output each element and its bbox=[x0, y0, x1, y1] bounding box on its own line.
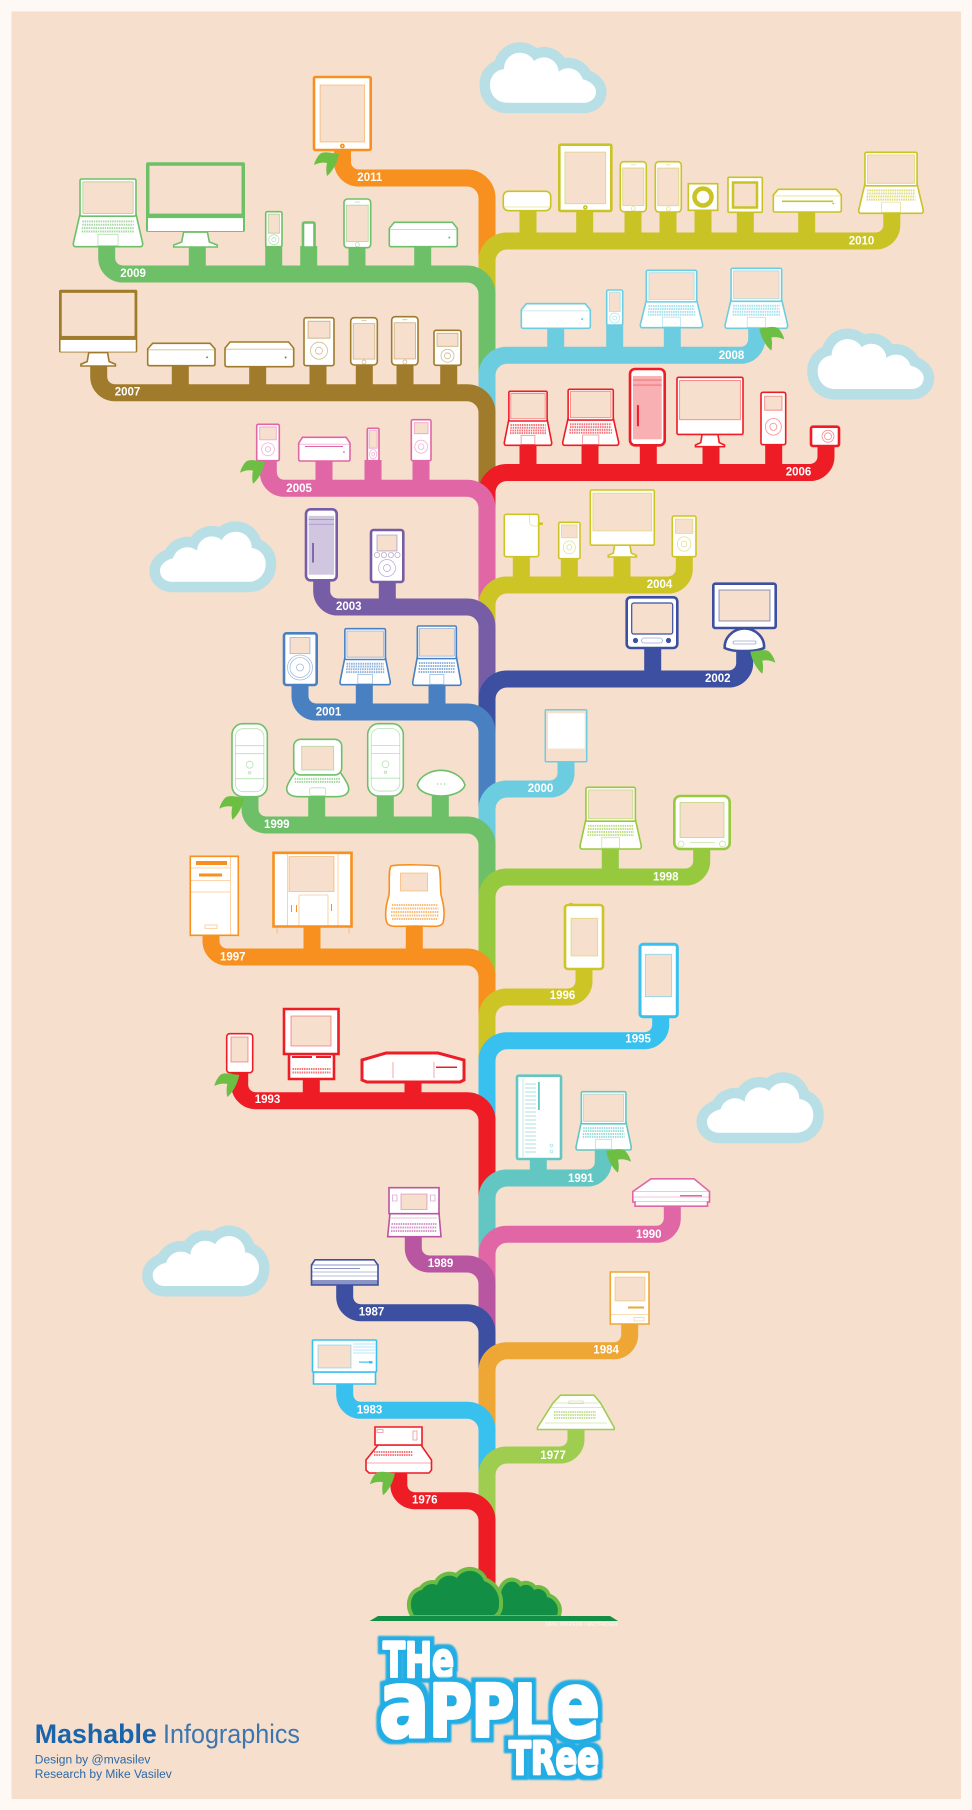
icon: PowerBook G3 bbox=[580, 787, 641, 849]
branch path 2009 bbox=[107, 245, 487, 376]
label 1976: 1976 bbox=[412, 1495, 438, 1507]
year 1997 branch bbox=[190, 853, 487, 1018]
icon: iBook clamshell bbox=[287, 739, 349, 797]
icon: leaf bbox=[314, 152, 339, 176]
year 1976 branch bbox=[366, 1427, 487, 1590]
label 2004: 2004 bbox=[647, 579, 673, 591]
brand name: Mashable bbox=[35, 1719, 157, 1749]
branch path 1998 bbox=[487, 848, 702, 978]
year 2003 branch bbox=[306, 509, 487, 700]
icon: iPhone 3GS bbox=[344, 199, 371, 248]
icon: iPod shuffle bbox=[811, 427, 839, 446]
year 1993 branch bbox=[214, 1009, 487, 1200]
icon: leaf bbox=[370, 1472, 395, 1495]
icon: iPod bbox=[672, 516, 696, 557]
branch path 1976 bbox=[399, 1472, 487, 1590]
icon: Time Capsule bbox=[521, 304, 590, 328]
branch path 1996 bbox=[487, 968, 584, 1062]
branch path 2003 bbox=[322, 579, 487, 700]
year 1977 branch bbox=[487, 1395, 614, 1522]
year 1987 branch bbox=[312, 1260, 487, 1372]
label 1991: 1991 bbox=[568, 1173, 594, 1185]
icon: MacBook bbox=[504, 391, 552, 445]
cloud: top center bbox=[490, 53, 596, 103]
icon: eMate 300 bbox=[386, 865, 444, 926]
icon: iPod touch bbox=[655, 162, 681, 212]
branch path 1997 bbox=[211, 926, 487, 1018]
year 1996 branch bbox=[487, 903, 603, 1062]
icon: PowerBook G4 bbox=[340, 629, 390, 685]
icon: eMac bbox=[627, 597, 677, 648]
icon: iPod classic bbox=[304, 318, 334, 366]
year 1989 branch bbox=[388, 1188, 487, 1334]
year 2011 branch bbox=[314, 77, 487, 262]
design credit: Design by @mvasilev bbox=[35, 1754, 151, 1766]
icon: Mac mini bbox=[299, 437, 350, 461]
cloud: top right bbox=[818, 339, 924, 389]
icon: PowerBook bbox=[576, 1092, 631, 1150]
icon: Time Capsule bbox=[225, 342, 294, 367]
label 1987: 1987 bbox=[359, 1306, 384, 1318]
icon: Power Mac tower bbox=[190, 856, 238, 935]
icon: Newton bbox=[227, 1034, 253, 1073]
branch path 2001 bbox=[300, 684, 487, 810]
icon: MacBook bbox=[73, 179, 143, 247]
icon: iMac G3 bbox=[674, 796, 730, 849]
icon: iMac G4 bbox=[713, 584, 776, 651]
brand: Mashable Infographics bbox=[35, 1719, 300, 1749]
label 2000: 2000 bbox=[528, 783, 553, 795]
label 1984: 1984 bbox=[593, 1345, 619, 1357]
research credit: Research by Mike Vasilev bbox=[35, 1769, 172, 1781]
icon: Newton MessagePad bbox=[565, 903, 603, 969]
label 2010: 2010 bbox=[849, 235, 874, 247]
icon: MacBook Air bbox=[859, 152, 923, 213]
icon: iPod nano bbox=[434, 330, 461, 365]
year 2006 branch bbox=[487, 369, 839, 510]
data source credit: DATA : WIKIPEDIA / MACTRACKER bbox=[546, 1622, 618, 1628]
icon: leaf bbox=[214, 1073, 239, 1097]
branch path 1987 bbox=[345, 1285, 487, 1372]
icon: Mac mini bbox=[389, 222, 457, 247]
branch path 1991 bbox=[487, 1149, 603, 1256]
branch path 1983 bbox=[345, 1384, 487, 1477]
icon: MacBook Air bbox=[725, 268, 788, 328]
label 2008: 2008 bbox=[719, 350, 745, 362]
icon: leaf bbox=[759, 327, 784, 350]
year 1999 branch bbox=[219, 724, 487, 898]
icon: iPod nano bbox=[257, 424, 279, 461]
year 2005 branch bbox=[240, 420, 487, 606]
icon: Macintosh TV bbox=[284, 1009, 338, 1079]
year 1991 branch bbox=[487, 1076, 631, 1256]
cloud: left 2003 bbox=[160, 532, 266, 582]
icon: Apple Lisa bbox=[312, 1340, 376, 1384]
icon: leaf bbox=[606, 1149, 631, 1173]
year 1983 branch bbox=[312, 1340, 487, 1477]
label 2009: 2009 bbox=[120, 268, 146, 280]
label 1983: 1983 bbox=[357, 1405, 382, 1417]
icon: iPhone bbox=[351, 318, 377, 365]
title word: Apple: aPPLe bbox=[379, 1650, 600, 1758]
year 1984 branch bbox=[487, 1272, 649, 1432]
icon: iPod nano bbox=[266, 212, 282, 247]
branch path 2005 bbox=[268, 460, 487, 606]
branch path 2008 bbox=[487, 323, 757, 414]
cloud: right 1991 bbox=[707, 1083, 813, 1133]
icon: iPod nano bbox=[607, 290, 623, 325]
icon: iPod mini bbox=[559, 522, 580, 559]
brand section: Infographics bbox=[163, 1719, 300, 1749]
icon: iPhone 4 bbox=[620, 162, 646, 212]
branch path 1990 bbox=[487, 1206, 672, 1285]
year 2008 branch bbox=[487, 268, 788, 414]
year 2009 branch bbox=[73, 162, 487, 376]
icon: leaf bbox=[750, 650, 775, 674]
icon: iPad bbox=[314, 77, 371, 150]
icon: Macintosh II bbox=[312, 1260, 378, 1285]
icon: iMac bbox=[146, 162, 245, 247]
icon: iPod bbox=[761, 392, 786, 445]
label 1989: 1989 bbox=[428, 1258, 453, 1270]
branch path 2002 bbox=[487, 647, 745, 733]
icon: Power Mac G5 bbox=[306, 509, 337, 580]
icon: Apple TV / server bbox=[773, 189, 841, 212]
year 2007 branch bbox=[59, 290, 487, 494]
branch path 1984 bbox=[487, 1323, 630, 1432]
label 1993: 1993 bbox=[255, 1094, 280, 1106]
credits bbox=[35, 1754, 172, 1781]
branch path 1989 bbox=[413, 1236, 487, 1334]
icon: leaf bbox=[219, 796, 244, 820]
year 1995 branch bbox=[487, 944, 677, 1122]
bush: left bbox=[411, 1571, 499, 1615]
branch path 2007 bbox=[99, 364, 487, 494]
icon: iPod shuffle bbox=[303, 222, 314, 248]
icon: Apple II bbox=[538, 1395, 614, 1430]
icon: Macintosh 128K bbox=[610, 1272, 649, 1324]
icon: iPad 2010 bbox=[559, 145, 611, 211]
icon: Macintosh box bbox=[362, 1053, 464, 1082]
icon: Power Mac G4 bbox=[232, 724, 267, 797]
icon: Quadra tower bbox=[517, 1076, 561, 1159]
branch path 2000 bbox=[487, 761, 566, 846]
icon: Power Mac G4 Cube bbox=[545, 710, 587, 762]
year 2001 branch bbox=[284, 626, 487, 810]
icon: iMac G5 bbox=[590, 490, 654, 557]
label 2005: 2005 bbox=[286, 483, 312, 495]
year 1998 branch bbox=[487, 787, 730, 978]
icon: iPod shuffle bbox=[688, 184, 718, 210]
icon: MacBook bbox=[640, 270, 703, 328]
branch path 2010 bbox=[487, 209, 892, 295]
icon: Twentieth Anniversary Mac bbox=[274, 853, 352, 934]
icon: Mac Pro bbox=[630, 369, 665, 445]
branch path 1977 bbox=[487, 1429, 576, 1522]
branch path 1995 bbox=[487, 1016, 661, 1122]
label 1999: 1999 bbox=[264, 819, 290, 831]
icon: iPod shuffle bbox=[367, 428, 379, 461]
label 2006: 2006 bbox=[786, 466, 811, 478]
ground bbox=[370, 1616, 618, 1621]
icon: Apple I bbox=[366, 1427, 432, 1473]
icon: Newton bbox=[640, 944, 677, 1017]
icon: iBook bbox=[413, 626, 461, 685]
label 2001: 2001 bbox=[316, 706, 342, 718]
branch path 2004 bbox=[487, 555, 684, 628]
label 2003: 2003 bbox=[336, 601, 362, 613]
year 1990 branch bbox=[487, 1179, 710, 1285]
icon: leaf bbox=[240, 460, 265, 484]
icon: Mac mini bbox=[148, 343, 215, 366]
label 2007: 2007 bbox=[115, 386, 140, 398]
label 1977: 1977 bbox=[540, 1450, 566, 1462]
bush: right bbox=[499, 1582, 558, 1615]
icon: AirPort base station bbox=[417, 770, 465, 796]
icon: Macintosh Portable bbox=[388, 1188, 441, 1237]
year 2002 branch bbox=[487, 584, 776, 733]
title word: Tree: TRee bbox=[509, 1732, 599, 1785]
label 1996: 1996 bbox=[550, 990, 575, 1002]
icon: iPod third gen bbox=[371, 530, 403, 582]
label 2011: 2011 bbox=[357, 172, 383, 184]
branch path 2011 bbox=[342, 149, 487, 262]
branch path 1993 bbox=[240, 1072, 487, 1200]
icon: iPod bbox=[411, 420, 431, 461]
icon: power adapter bbox=[504, 514, 543, 557]
branch path 2006 bbox=[487, 444, 826, 510]
icon: iMac bbox=[677, 377, 743, 447]
icon: MacBook Pro bbox=[563, 389, 619, 445]
icon: iPod bbox=[284, 633, 317, 685]
icon: Mac mini bbox=[503, 191, 551, 211]
icon: iPod touch bbox=[392, 317, 418, 365]
label 2002: 2002 bbox=[705, 673, 731, 685]
label 1995: 1995 bbox=[625, 1034, 651, 1046]
year 2004 branch bbox=[487, 490, 696, 628]
label 1990: 1990 bbox=[636, 1229, 662, 1241]
label 1998: 1998 bbox=[653, 871, 679, 883]
icon: iMac bbox=[59, 290, 137, 366]
title: The Apple Tree bbox=[379, 1633, 600, 1785]
year 2000 branch bbox=[487, 710, 587, 846]
icon: Power Mac G3 bbox=[368, 724, 403, 796]
year 2010 branch bbox=[487, 145, 923, 295]
icon: iPod nano square bbox=[728, 177, 762, 212]
title word: The: THe bbox=[383, 1633, 454, 1689]
cloud: left 1987 bbox=[153, 1236, 259, 1286]
branch path 1999 bbox=[250, 795, 487, 898]
label 1997: 1997 bbox=[220, 951, 246, 963]
icon: Macintosh LC bbox=[633, 1179, 710, 1206]
